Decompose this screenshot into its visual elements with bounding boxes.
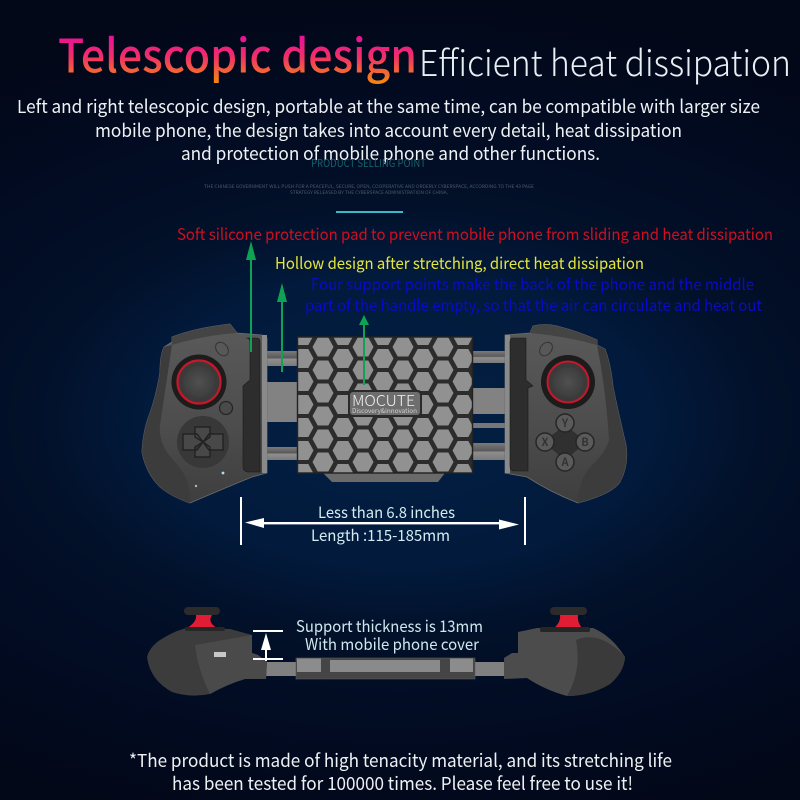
- phone clamp panel: [298, 337, 472, 482]
- thickness dimension: [253, 630, 283, 661]
- side view gamepad: [147, 607, 625, 696]
- right oval button: [537, 340, 555, 358]
- logo plate: MOCUTE: [352, 390, 415, 411]
- right rails: [471, 351, 508, 460]
- intro paragraph: [17, 93, 760, 166]
- action buttons: Y: [561, 415, 569, 431]
- action buttons: A: [560, 454, 569, 470]
- footer note: [129, 747, 672, 796]
- faded small print: [204, 184, 534, 196]
- callout: four support points: part of the handle empty, so that the air can circulate and heat out: [305, 292, 762, 316]
- callout: four support points: [305, 271, 762, 316]
- intro paragraph: Left and right telescopic design, portable at the same time, can be compatible with larger size: [17, 93, 760, 119]
- right handle: [505, 324, 627, 503]
- thickness label: Support thickness is 13mm: [296, 613, 483, 637]
- accent bar: [336, 211, 403, 213]
- arrow: silicone pad: [246, 241, 256, 352]
- left handle: [142, 324, 267, 503]
- thickness label: [296, 613, 483, 655]
- callout: soft silicone pad: Soft silicone protection pad to prevent mobile phone from sliding and heat dissipation: [177, 221, 773, 245]
- intro paragraph: mobile phone, the design takes into account every detail, heat dissipation: [95, 117, 682, 143]
- left rails: [262, 351, 299, 460]
- right handle side: [504, 607, 625, 696]
- top view gamepad: [142, 324, 627, 503]
- indicator lights: [222, 472, 224, 474]
- right grip pad: [510, 338, 533, 471]
- right joystick: [541, 355, 595, 409]
- width dimension: [240, 497, 526, 546]
- thickness label: With mobile phone cover: [305, 631, 480, 655]
- right stick: [540, 607, 590, 632]
- centre clamp: [296, 658, 475, 679]
- arrow: hollow design: [277, 283, 287, 372]
- footer note: *The product is made of high tenacity material, and its stretching life: [129, 747, 672, 773]
- left stick: [184, 607, 225, 631]
- power button: [220, 402, 232, 414]
- action buttons: B: [581, 434, 589, 450]
- width dimension: Length :115-185mm: [311, 524, 450, 546]
- width dimension: Less than 6.8 inches: [318, 501, 455, 523]
- callout: hollow design: Hollow design after stretching, direct heat dissipation: [275, 250, 644, 274]
- callout: four support points: Four support points make the back of the phone and the middle: [311, 271, 754, 295]
- logo plate: [348, 390, 422, 417]
- footer note: has been tested for 100000 times. Please feel free to use it!: [172, 770, 633, 796]
- d-pad: [177, 416, 229, 468]
- logo plate: Discovery&innovation: [352, 405, 417, 415]
- faded small print: STRATEGY RELEASED BY THE CYBERSPACE ADMINISTRATION OF CHINA.: [290, 190, 448, 196]
- arrow: support points: [359, 315, 369, 385]
- faded small print: THE CHINESE GOVERNMENT WILL PUSH FOR A PEACEFUL, SECURE, OPEN, COOPERATIVE AND ORDERLY CYBERSPACE, ACCORDING TO THE 43 PAGE: [204, 184, 534, 190]
- title: Telescopic design: Telescopic design: [58, 20, 417, 86]
- left handle side: [147, 607, 267, 696]
- action buttons: X: [542, 434, 549, 450]
- grip pad: [243, 338, 260, 472]
- side rails: [264, 662, 506, 676]
- oval button: [213, 340, 231, 358]
- action buttons: [536, 414, 594, 471]
- intro paragraph: and protection of mobile phone and other functions.: [181, 140, 600, 166]
- faded heading: product selling point: PRODUCT SELLING POINT: [311, 155, 426, 171]
- joystick: [172, 354, 226, 410]
